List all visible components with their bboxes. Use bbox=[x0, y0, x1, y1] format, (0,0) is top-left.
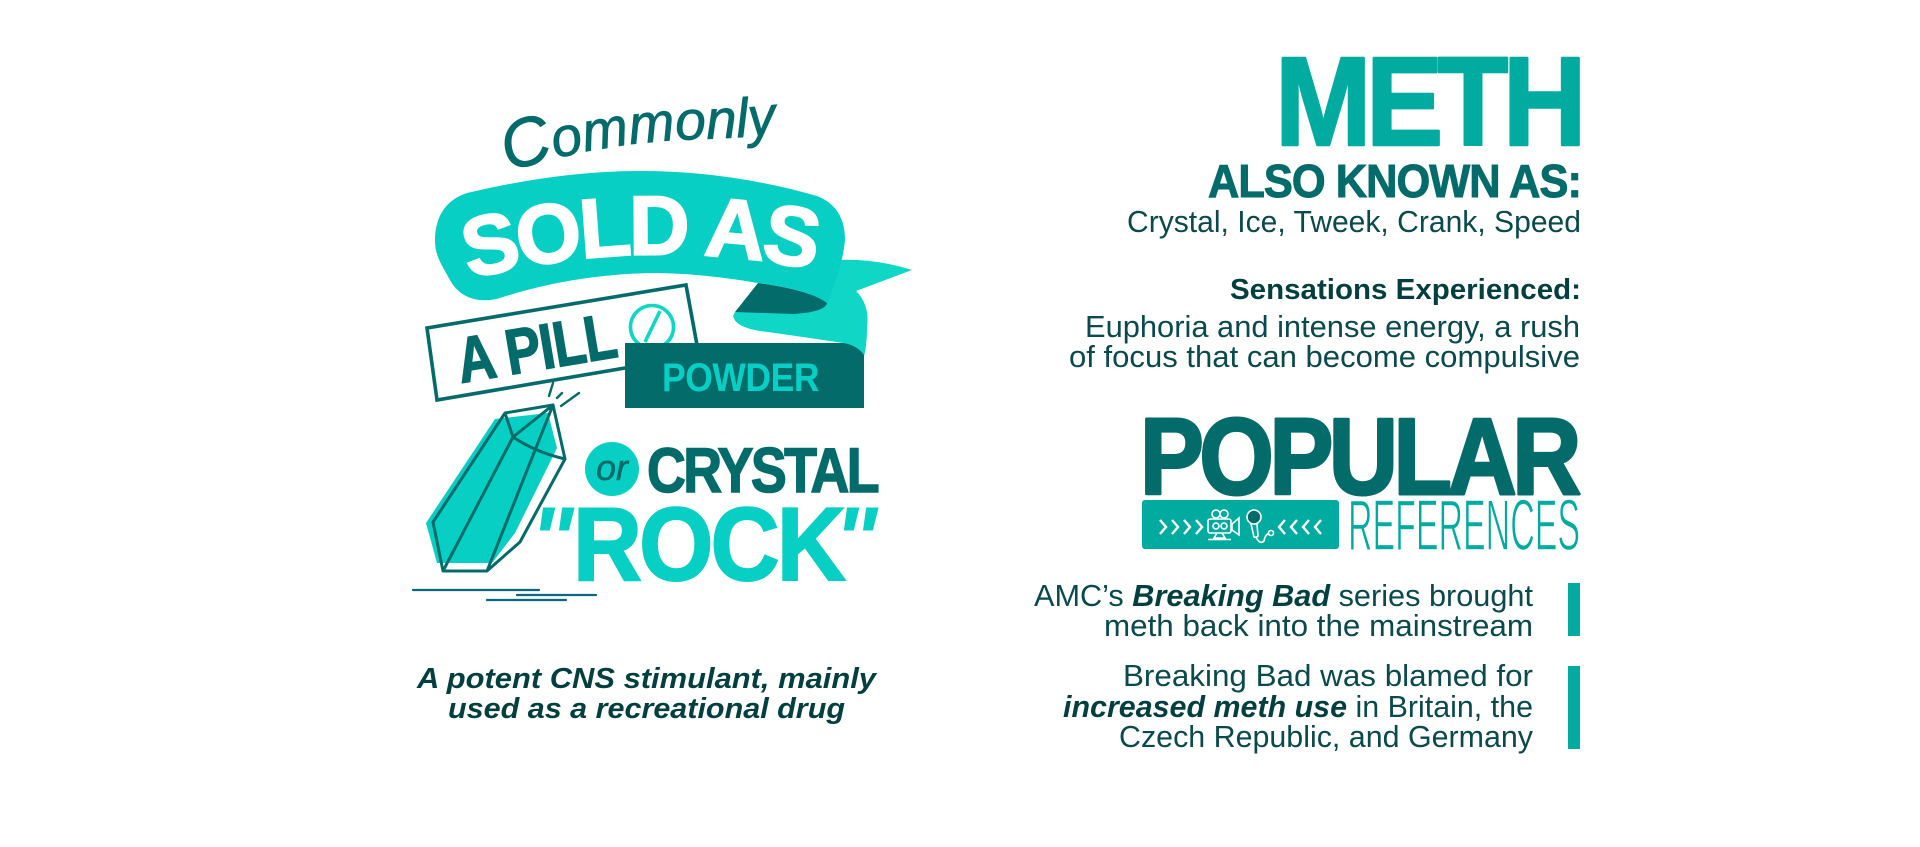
text: street names: Crystal, Ice, Tweek, Crank, Speed bbox=[1127, 204, 1581, 239]
script heading: Commonly bbox=[504, 96, 778, 168]
text: reference one: AMC’s Breaking Bad series brought bbox=[1034, 578, 1533, 613]
caption: description: A potent CNS stimulant, mainly bbox=[416, 663, 878, 695]
accent bar two bbox=[1568, 666, 1580, 749]
text: sensations description bbox=[1069, 309, 1580, 374]
caption: description bbox=[416, 663, 878, 725]
ribbon fold bbox=[735, 283, 827, 314]
banner text: SOLD AS bbox=[463, 196, 819, 276]
text: ROCK with quotes: " bbox=[834, 489, 879, 591]
panel: sold as illustration bbox=[412, 96, 912, 603]
text: reference two bbox=[1063, 658, 1533, 754]
badge: or: or bbox=[596, 447, 630, 488]
icon: pill bbox=[630, 306, 674, 348]
text: reference two: Czech Republic, and Germany bbox=[1119, 719, 1533, 754]
caption: description: used as a recreational drug bbox=[448, 693, 845, 725]
accent bar one bbox=[1568, 583, 1580, 636]
infographic canvas: REFERENCES bbox=[1348, 486, 1580, 566]
chevrons left bbox=[1279, 520, 1321, 534]
label text: A PILL: A PILL bbox=[451, 299, 621, 397]
text: sensations description: Euphoria and intense energy, a rush bbox=[1085, 309, 1580, 344]
powder block bbox=[625, 343, 864, 408]
text: ROCK with quotes: ROCK bbox=[573, 487, 846, 603]
text: reference two: increased meth use in Britain, the bbox=[1063, 689, 1533, 724]
title: METH: METH bbox=[1275, 31, 1581, 172]
text: reference one bbox=[1034, 578, 1533, 643]
heading: POPULAR: POPULAR bbox=[1140, 396, 1580, 518]
text: sensations description: of focus that can become compulsive bbox=[1069, 339, 1580, 374]
banner: film and mic icons bbox=[1142, 500, 1339, 549]
icon: microphone bbox=[1247, 510, 1274, 542]
ribbon tail bbox=[733, 260, 912, 356]
icon: crystal bbox=[413, 383, 596, 600]
script heading: Commonly: Commonly bbox=[504, 96, 778, 168]
text: CRYSTAL: CRYSTAL bbox=[647, 436, 878, 506]
banner text: SOLD AS: SOLD AS bbox=[463, 196, 819, 276]
ribbon banner bbox=[435, 171, 845, 303]
text: ROCK with quotes: " bbox=[530, 489, 575, 591]
text: reference two: Breaking Bad was blamed for bbox=[1123, 658, 1533, 693]
powder text: POWDER bbox=[662, 356, 820, 400]
heading: sensations: Sensations Experienced: bbox=[1230, 274, 1581, 306]
text: reference one: meth back into the mainstream bbox=[1104, 608, 1533, 643]
badge: or bbox=[585, 442, 639, 496]
pill label box bbox=[427, 285, 697, 400]
heading: also known as: ALSO KNOWN AS: bbox=[1208, 155, 1581, 207]
chevrons right bbox=[1160, 520, 1202, 534]
icon: film camera bbox=[1208, 510, 1239, 540]
